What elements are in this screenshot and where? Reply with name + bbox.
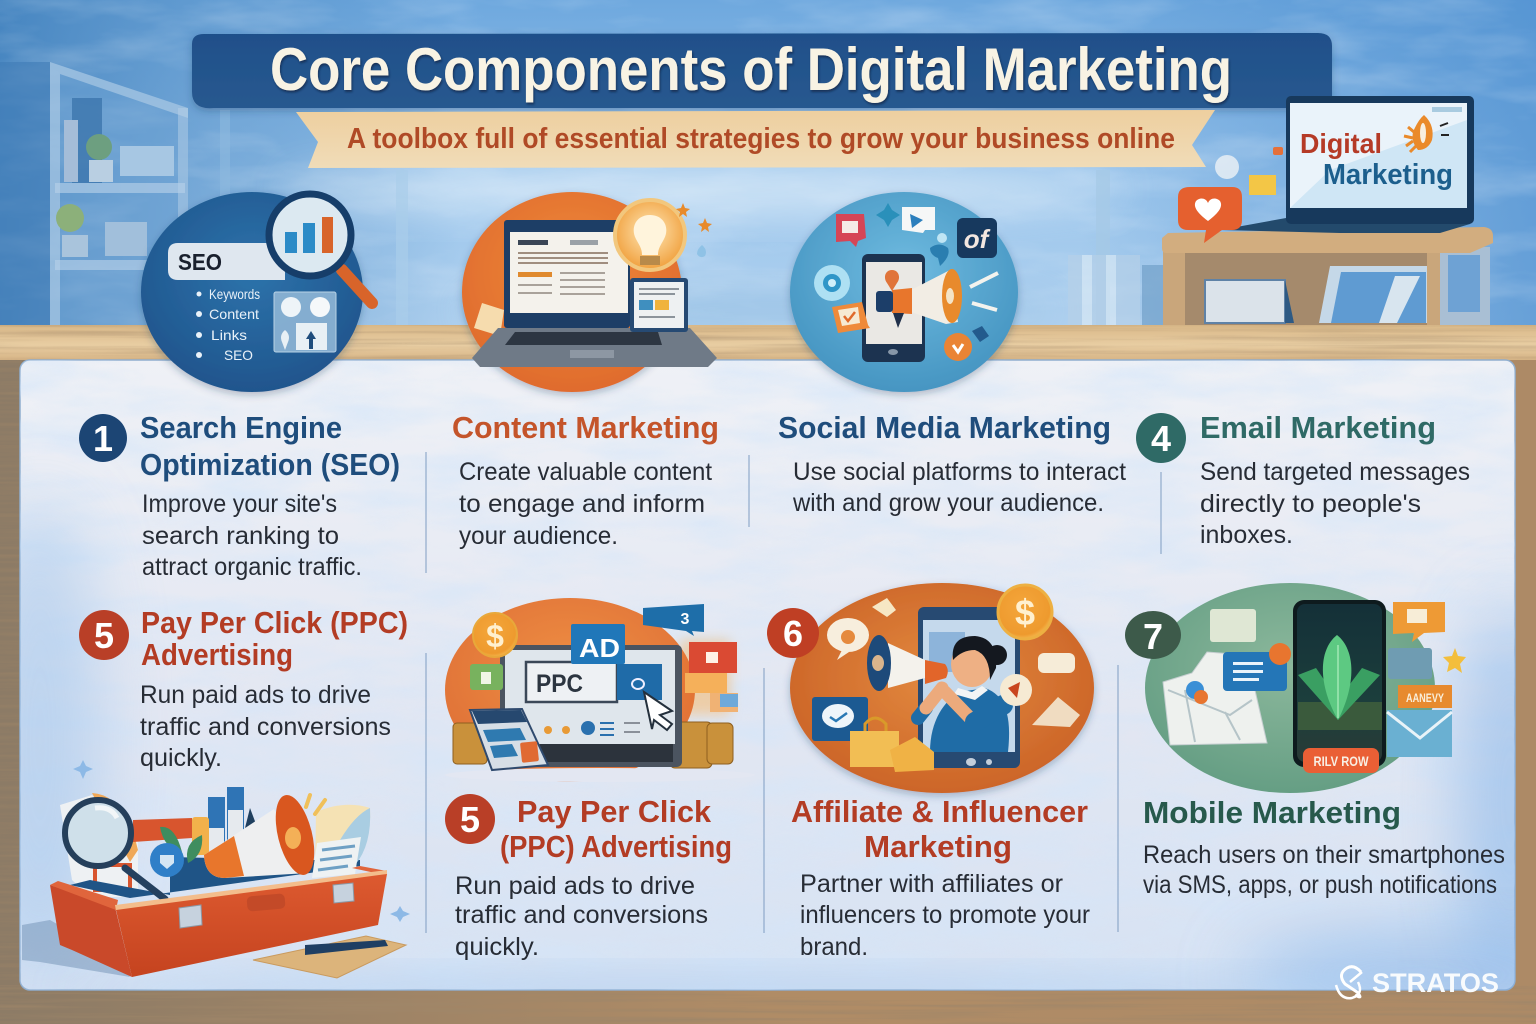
illustration: SEO: [141, 192, 372, 392]
AD box: [571, 624, 625, 664]
button: RILV ROW: [1314, 753, 1369, 769]
megaphone: [876, 269, 962, 328]
badge 5: [445, 794, 495, 844]
coin: [473, 613, 517, 657]
PPC box: PPC: [536, 670, 583, 698]
subtitle ribbon: [296, 110, 1215, 168]
description: Partner with affiliates or: [800, 870, 1063, 898]
badge 1: [79, 414, 127, 462]
description: quickly.: [140, 744, 222, 772]
illustration: PPC: [445, 598, 755, 782]
SEO search bar: SEO: [178, 249, 222, 275]
wooden desk with frames: [1162, 227, 1493, 325]
description: inboxes.: [1200, 521, 1293, 549]
smartphone: [1293, 600, 1386, 767]
description: to engage and inform: [459, 490, 705, 518]
heading: Affiliate & Influencer: [791, 794, 1088, 829]
badge 5: 5: [94, 615, 114, 656]
coin: [998, 585, 1052, 639]
description: Reach users on their smartphones: [1143, 841, 1505, 869]
decor: faded books: [1068, 255, 1164, 325]
item 6: affiliate and influencer: [791, 794, 1090, 961]
description: traffic and conversions: [140, 713, 391, 741]
screen: [500, 645, 682, 767]
tools in the box: [60, 787, 370, 899]
heading: Optimization (SEO): [140, 447, 400, 482]
SEO search bar: [168, 243, 285, 280]
heading: Pay Per Click (PPC): [141, 605, 408, 640]
illustration: social media: [790, 192, 1018, 392]
badge 4: [1136, 413, 1186, 463]
cursor: [644, 692, 672, 730]
calculator: [470, 709, 548, 770]
icon: heart speech bubble: [1178, 147, 1283, 243]
checklist: Keywords: [209, 286, 260, 302]
description: Create valuable content: [459, 458, 712, 486]
illustration: content marketing: [462, 192, 717, 392]
item 3: social media marketing: [778, 410, 1126, 517]
checklist: Content: [209, 306, 259, 322]
PPC box: [526, 662, 662, 702]
coin: $: [486, 618, 504, 654]
badge 7: [1125, 611, 1181, 659]
laptop: Digital Marketing: Digital: [1300, 128, 1382, 159]
checklist: SEO: [224, 347, 253, 363]
badge 6: 6: [783, 613, 803, 654]
floating icons: 3: [681, 611, 690, 628]
checklist: [196, 286, 260, 363]
laptop: [472, 220, 717, 367]
description: with and grow your audience.: [792, 489, 1104, 517]
notebook and pen: [253, 936, 406, 978]
floating icons: [470, 604, 738, 712]
stars: [676, 203, 712, 257]
wood shelf strip: [0, 325, 1536, 365]
item 2: content marketing: [452, 410, 719, 550]
map and documents: [1163, 652, 1267, 745]
description: influencers to promote your: [800, 901, 1090, 929]
badge 7: 7: [1143, 616, 1163, 657]
item 4: email marketing: [1136, 410, 1470, 549]
heading: Search Engine: [140, 410, 342, 445]
icon panel: [274, 292, 336, 352]
heading: Content Marketing: [452, 410, 719, 445]
badge 4: 4: [1151, 418, 1171, 459]
heading: Email Marketing: [1200, 410, 1436, 445]
heading: Pay Per Click: [517, 794, 712, 829]
coins: [453, 722, 733, 768]
message card: [1223, 643, 1291, 691]
heading: Mobile Marketing: [1143, 795, 1401, 830]
heading: Marketing: [864, 829, 1012, 864]
description: Use social platforms to interact: [793, 458, 1126, 486]
description: attract organic traffic.: [142, 553, 362, 581]
badge 5: [79, 610, 129, 660]
social icons: [814, 203, 998, 361]
faded bookshelf on left: [0, 62, 188, 325]
tablet: [918, 607, 1020, 768]
description: brand.: [800, 933, 868, 961]
megaphone: [867, 635, 948, 691]
shopping bag and envelope: [850, 718, 934, 772]
title: Core Components of Digital Marketing: [270, 36, 1232, 103]
illustration: toolbox: [22, 760, 410, 978]
description: via SMS, apps, or push notifications: [1143, 871, 1497, 899]
description: quickly.: [455, 933, 539, 961]
button: [1303, 748, 1379, 773]
speech bubbles: [827, 598, 1080, 727]
envelope: [474, 303, 504, 336]
description: Improve your site's: [142, 490, 337, 518]
magnifier with bar chart: [269, 194, 372, 303]
laptop: Digital Marketing: [1220, 96, 1474, 233]
red box: [50, 866, 387, 977]
item 5: pay per click left column: [79, 605, 408, 772]
title banner: [192, 33, 1332, 108]
badge 6: [767, 608, 819, 658]
leaf: [1298, 668, 1380, 720]
illustration: mobile marketing: [1145, 583, 1466, 793]
check box: [812, 697, 868, 741]
subtitle: A toolbox full of essential strategies to grow your business online: [347, 123, 1175, 155]
description: Run paid ads to drive: [455, 872, 695, 900]
item 5 center: pay per click: [445, 794, 732, 961]
side cards: [1387, 602, 1466, 757]
description: search ranking to: [142, 522, 339, 550]
badge 1: 1: [93, 418, 113, 459]
description: Send targeted messages: [1200, 458, 1470, 486]
description: Run paid ads to drive: [140, 681, 371, 709]
side cards: AANEVY: [1406, 691, 1444, 705]
laptop: Digital Marketing: Marketing: [1323, 159, 1453, 191]
description: traffic and conversions: [455, 901, 708, 929]
heading: Social Media Marketing: [778, 410, 1111, 445]
phone: [862, 254, 925, 362]
item 1: search engine optimization: [79, 410, 400, 581]
badge 5: 5: [460, 799, 480, 840]
wood table bottom and sides: [0, 360, 1536, 1024]
heading: Advertising: [141, 637, 293, 672]
illustration: affiliate and influencer: [790, 583, 1094, 793]
social icons: of: [964, 224, 991, 254]
heading: (PPC) Advertising: [500, 829, 732, 864]
checklist: Links: [211, 327, 247, 343]
coin: $: [1015, 592, 1035, 633]
AD box: AD: [579, 633, 620, 663]
description: directly to people's: [1200, 490, 1421, 518]
description: your audience.: [459, 522, 618, 550]
lightbulb: [615, 200, 685, 270]
logo: Stratos: STRATOS: [1372, 968, 1499, 998]
person: [918, 636, 1009, 752]
item 7: mobile marketing: [1143, 795, 1505, 899]
tablet: [630, 278, 688, 332]
main content panel: [0, 360, 1536, 1015]
